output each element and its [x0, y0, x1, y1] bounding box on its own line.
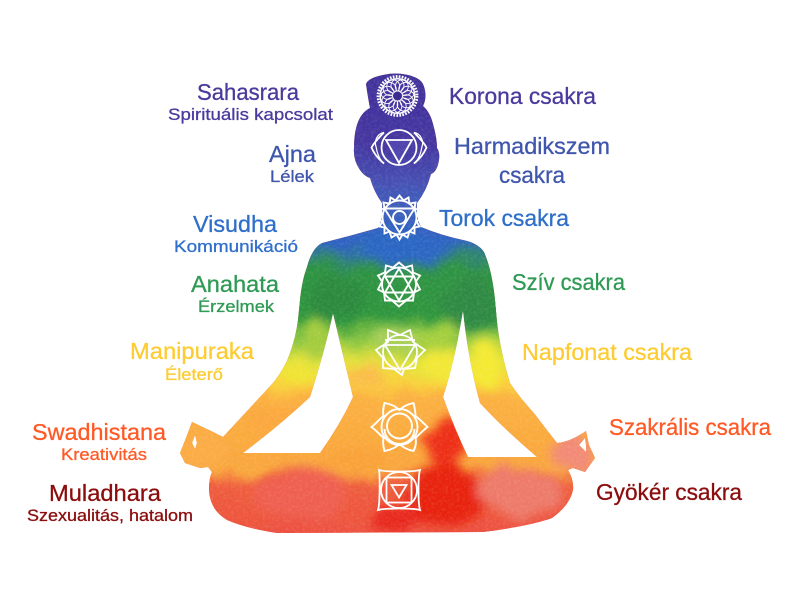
icon: third eye chakra — [372, 130, 426, 165]
icon: solar plexus chakra — [376, 330, 425, 375]
label: Ajna: Lélek — [270, 167, 315, 186]
label: Sahasrara — [168, 79, 333, 124]
icon: throat chakra — [378, 196, 422, 240]
icon: crown chakra — [378, 76, 417, 116]
meditating watercolor silhouette — [180, 74, 595, 533]
label: Manipuraka: Manipuraka — [130, 338, 255, 364]
label: Visudha: Kommunikáció — [174, 237, 298, 256]
label: Anahata — [191, 271, 280, 316]
label: Visudha: Visudha — [193, 211, 278, 237]
label: Visudha — [174, 211, 298, 256]
icon: sacral chakra — [372, 403, 428, 451]
label: Anahata: Anahata — [191, 271, 280, 297]
label: Szakrális csakra: Szakrális csakra — [609, 414, 772, 440]
label: Ajna — [269, 141, 317, 186]
label: Gyökér csakra: Gyökér csakra — [596, 479, 743, 505]
left labels: Sanskrit chakra names and meanings — [27, 79, 333, 525]
label: Harmadikszem csakra: Harmadikszem — [454, 133, 610, 159]
infographic canvas — [28, 74, 772, 533]
label: Muladhara — [27, 480, 193, 525]
label: Ajna: Ajna — [269, 141, 317, 167]
label: Anahata: Érzelmek — [198, 297, 275, 316]
label: Swadhistana: Swadhistana — [32, 419, 167, 445]
label: Swadhistana: Kreativitás — [61, 445, 147, 464]
label: Swadhistana — [32, 419, 167, 464]
label: Korona csakra: Korona csakra — [449, 83, 597, 109]
label: Napfonat csakra: Napfonat csakra — [522, 339, 693, 365]
icon: root chakra — [378, 470, 420, 510]
label: Muladhara: Muladhara — [49, 480, 162, 506]
label: Sahasrara: Spirituális kapcsolat — [168, 105, 333, 124]
label: Harmadikszem csakra — [454, 133, 610, 188]
label: Sahasrara: Sahasrara — [197, 79, 300, 105]
icon: heart chakra — [378, 262, 420, 306]
label: Szív csakra: Szív csakra — [512, 269, 626, 295]
right labels: Hungarian chakra names — [439, 83, 772, 505]
label: Manipuraka — [130, 338, 255, 384]
label: Torok csakra: Torok csakra — [439, 205, 570, 231]
label: Muladhara: Szexualitás, hatalom — [27, 506, 193, 525]
label: Harmadikszem csakra: csakra — [499, 162, 566, 188]
label: Manipuraka: Életerő — [165, 365, 223, 384]
